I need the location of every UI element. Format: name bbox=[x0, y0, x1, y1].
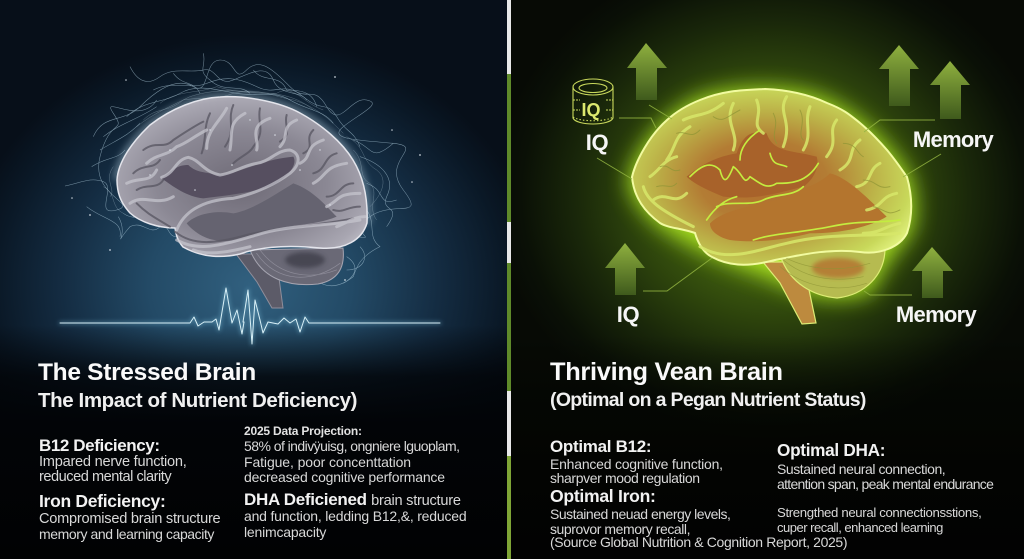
label: Memory top: Memory bbox=[913, 127, 995, 152]
text block: DHA deficiency bbox=[244, 490, 466, 540]
bright green veins bbox=[690, 130, 900, 240]
callout leader lines bbox=[597, 105, 941, 295]
icon: up arrow bottom right bbox=[912, 247, 953, 298]
olive sulci bbox=[657, 110, 900, 288]
text block: optimal DHA: attention span, peak mental endurance bbox=[777, 476, 993, 492]
left subheading: The Impact of Nutrient Deficiency) bbox=[38, 389, 357, 412]
panel: thriving vegan brain bbox=[511, 0, 1024, 559]
label: Memory bottom: Memory bbox=[896, 302, 978, 327]
cerebrum bbox=[117, 97, 367, 256]
text block: iron deficiency: Iron Deficiency: bbox=[39, 491, 165, 511]
icon: up arrow top left bbox=[627, 43, 667, 100]
right subheading: (Optimal on a Pegan Nutrient Status) bbox=[550, 389, 866, 411]
text block: DHA deficiency: DHA Deficiened brain structure bbox=[244, 490, 461, 509]
pale gyri bbox=[643, 97, 900, 255]
text block: optimal DHA: Sustained neural connection, bbox=[777, 461, 945, 477]
stressed brain bbox=[71, 76, 421, 308]
text block: B12 deficiency: reduced mental clarity bbox=[39, 469, 171, 485]
text block: optimal iron: suprovor memory recall, bbox=[550, 521, 690, 537]
text block: optimal B12 bbox=[550, 437, 723, 486]
icon: IQ database cylinder: IQ bbox=[581, 100, 601, 120]
dark sulci bbox=[133, 105, 360, 242]
icon: IQ database cylinder bbox=[573, 79, 613, 124]
text block: B12 deficiency: Impared nerve function, bbox=[39, 454, 187, 470]
center divider bbox=[507, 0, 511, 559]
dark inner folds bbox=[162, 157, 294, 198]
light ridges bbox=[127, 108, 365, 253]
ECG heartbeat line bbox=[60, 288, 440, 344]
text block: DHA deficiency: lenimcapacity bbox=[244, 524, 326, 540]
text block: B12 deficiency: B12 Deficiency: bbox=[39, 436, 160, 455]
text block: B12 deficiency bbox=[39, 436, 187, 485]
brain stem bbox=[236, 254, 283, 308]
text block: neural connections: Strengthed neural connectionsstions, bbox=[777, 505, 981, 520]
text block: 2025 data projection: 2025 Data Projection: bbox=[244, 424, 362, 438]
cerebellum bbox=[780, 248, 885, 298]
text block: neural connections: cuper recall, enhanced learning bbox=[777, 520, 943, 535]
icon: up arrow top right 1 bbox=[879, 45, 919, 106]
label: IQ top: IQ bbox=[586, 130, 608, 155]
brain glow bbox=[632, 91, 912, 295]
cerebrum bbox=[632, 89, 911, 265]
text block: optimal DHA: Optimal DHA: bbox=[777, 440, 885, 460]
thriving brain bbox=[632, 89, 911, 324]
icon: up arrow top right 2 bbox=[930, 61, 970, 119]
cerebellum hatching bbox=[257, 250, 340, 277]
brain stem bbox=[763, 262, 816, 324]
right heading: Thriving Vean Brain bbox=[550, 358, 783, 386]
icon: up arrow bottom left bbox=[605, 243, 645, 295]
source note: (Source Global Nutrition & Cognition Report, 2025) bbox=[550, 534, 847, 550]
text block: optimal iron: Optimal Iron: bbox=[550, 486, 656, 506]
text block: 2025 data projection: Fatigue, poor concenttation bbox=[244, 454, 411, 470]
text block: iron deficiency: Compromised brain structure bbox=[39, 511, 220, 527]
text block: 2025 data projection: 58% of indivÿuisg, ongniere lguoplam, bbox=[244, 438, 459, 454]
icon: tangled stress filaments bbox=[65, 53, 411, 286]
text block: optimal B12: sharpver mood regulation bbox=[550, 470, 700, 486]
left heading: The Stressed Brain bbox=[38, 359, 256, 386]
brain halo bbox=[117, 97, 367, 223]
text block: optimal iron bbox=[550, 486, 730, 537]
panel: stressed brain bbox=[0, 0, 507, 559]
orange cavities bbox=[687, 132, 818, 198]
text block: optimal B12: Enhanced cognitive function, bbox=[550, 456, 723, 472]
label: IQ bottom: IQ bbox=[617, 302, 639, 327]
text block: optimal DHA bbox=[777, 440, 994, 492]
text block: 2025 data projection bbox=[244, 424, 459, 485]
dust specks bbox=[71, 76, 421, 281]
cerebellum bbox=[250, 248, 343, 285]
text block: optimal iron: Sustained neuad energy levels, bbox=[550, 506, 730, 522]
text block: iron deficiency bbox=[39, 491, 220, 542]
text block: 2025 data projection: decreased cognitive performance bbox=[244, 469, 445, 485]
text block: optimal B12: Optimal B12: bbox=[550, 437, 651, 456]
text block: iron deficiency: memory and learning capacity bbox=[39, 526, 214, 542]
text block: neural connections bbox=[777, 505, 981, 535]
text block: DHA deficiency: and function, ledding B12,&, reduced bbox=[244, 508, 466, 524]
